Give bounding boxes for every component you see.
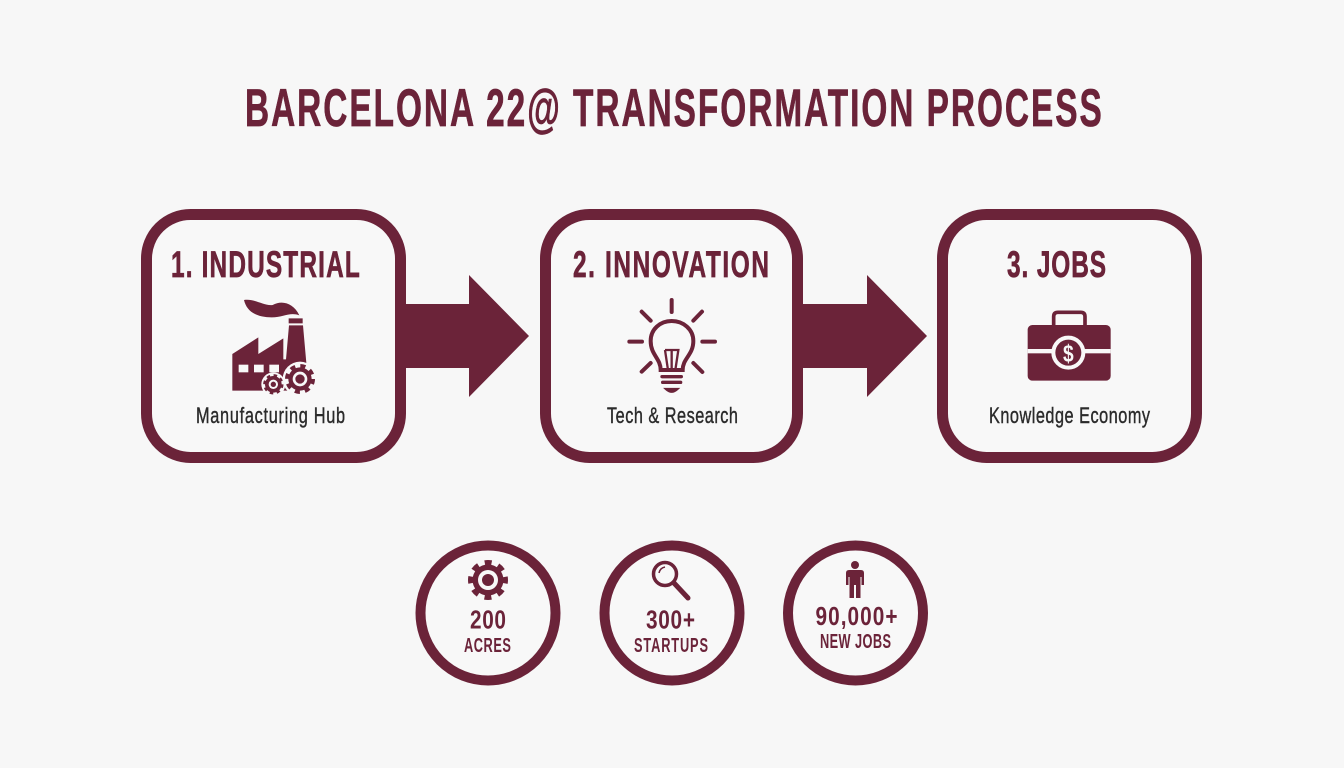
heading: innovation: 2. INNOVATION — [573, 244, 769, 285]
stat ring: startups — [604, 546, 740, 680]
icon: gear — [471, 563, 505, 597]
panel: jobs — [942, 214, 1196, 458]
stat value: 300+: 300+ — [646, 605, 695, 634]
stat: 300+ startups — [604, 546, 740, 680]
icon: magnifying glass — [654, 562, 688, 598]
icon: factory with gears — [232, 300, 317, 396]
stat label: startups: STARTUPS — [634, 634, 708, 657]
stat: 200 acres — [420, 546, 556, 680]
panel frame: industrial — [146, 214, 400, 458]
heading: industrial: 1. INDUSTRIAL — [171, 244, 360, 285]
caption: tech and research: Tech & Research — [607, 404, 738, 429]
stat label: new jobs: NEW JOBS — [820, 630, 891, 653]
stat ring: acres — [420, 546, 556, 680]
arrow: innovation to jobs — [797, 275, 927, 397]
stat ring: new jobs — [788, 546, 923, 680]
panel frame: innovation — [546, 214, 798, 458]
stat value: 90,000+: 90,000+ — [816, 602, 898, 631]
icon: briefcase with dollar sign — [1028, 312, 1111, 381]
stat: 90,000+ new jobs — [788, 546, 923, 680]
caption: knowledge economy: Knowledge Economy — [989, 404, 1150, 429]
title: BARCELONA 22@ TRANSFORMATION PROCESS — [245, 79, 1102, 138]
arrow: industrial to innovation — [400, 275, 529, 397]
stat label: acres: ACRES — [464, 634, 511, 657]
panel: innovation — [546, 214, 798, 458]
icon: light bulb — [629, 300, 715, 392]
panel frame: jobs — [942, 214, 1196, 458]
panel: industrial — [146, 214, 400, 458]
icon: person — [846, 561, 864, 598]
stat value: 200: 200 — [470, 605, 506, 634]
icon: briefcase with dollar sign: $ — [1063, 339, 1074, 367]
caption: manufacturing hub: Manufacturing Hub — [196, 404, 345, 429]
heading: jobs: 3. JOBS — [1007, 244, 1106, 285]
